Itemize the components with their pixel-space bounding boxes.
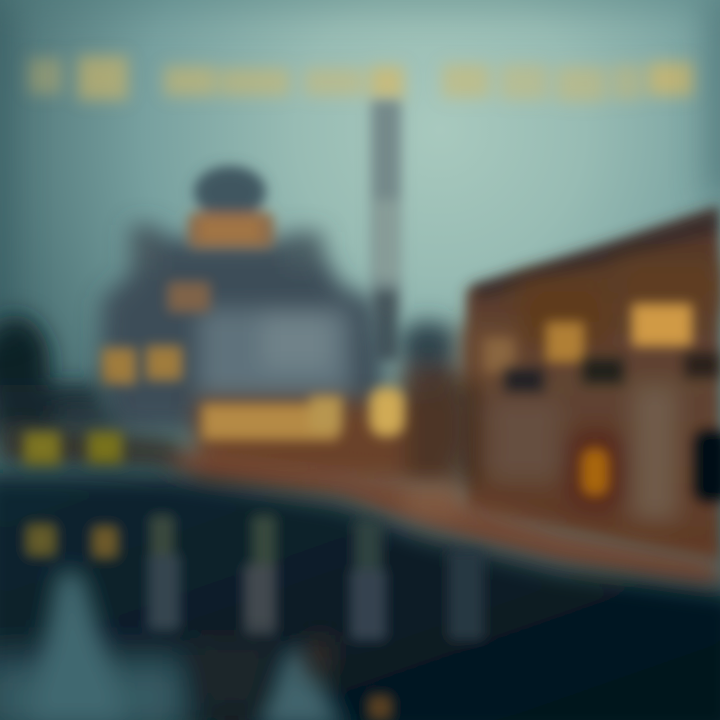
mosque: central dome [188, 166, 274, 248]
embankment and quay [0, 425, 720, 590]
minaret [371, 100, 401, 360]
right building: lit windows [484, 304, 692, 496]
edge vignette [0, 0, 720, 330]
right building: architectural detail [455, 262, 720, 520]
water: window reflections [26, 524, 392, 720]
right building: dark openings [504, 352, 720, 502]
mosque: main body [100, 225, 385, 430]
mosque: warm upper and side windows [102, 282, 210, 384]
right building [466, 205, 720, 560]
dark trees on left [0, 315, 115, 435]
right dome [398, 321, 465, 460]
water: column reflections [148, 515, 484, 640]
title band: illegible blurred yellow lettering [28, 56, 694, 102]
water: teal sky reflections [0, 655, 190, 720]
water: dark reflection of central dome [190, 635, 335, 710]
water: dark reflection [0, 474, 720, 720]
left shore lit windows [24, 432, 122, 466]
lit colonnade under the mosque [195, 395, 460, 490]
